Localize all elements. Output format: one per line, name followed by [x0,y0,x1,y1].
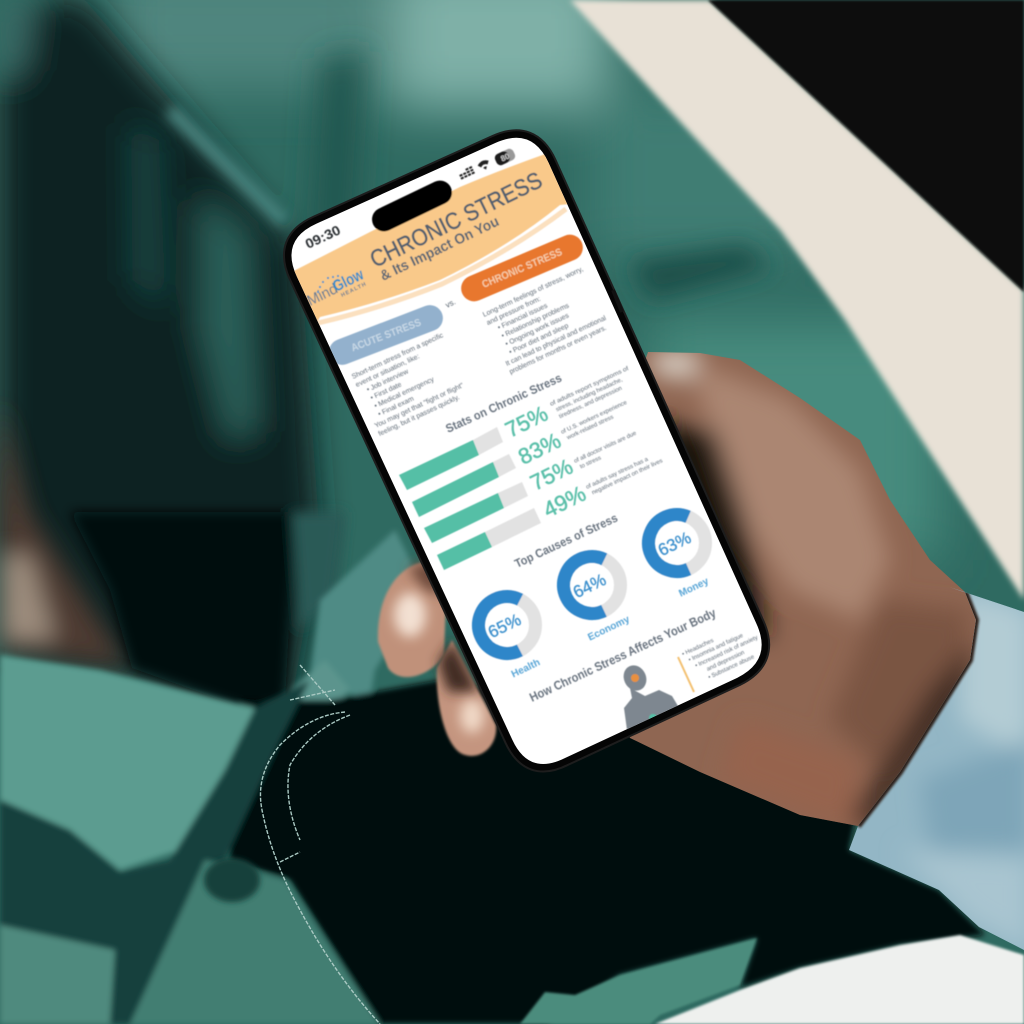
finger: middle [437,640,496,756]
body section heading: How Chronic Stress Affects Your Body [527,606,718,705]
logo: Mind [304,280,341,310]
symptoms list: • Increased risk of anxiety [694,635,759,669]
symptoms list: • Insomnia and fatigue [688,633,745,664]
white shirt at bottom [655,935,1024,1024]
stat: 49% negative impact [545,457,663,516]
jacket: lower folds [0,530,985,1024]
chronic stress description: Long-term feelings of stress, worry, [482,266,585,319]
acute stress description: • First date [370,381,403,402]
dark background corner [708,0,1024,292]
cream fabric strip [570,0,1024,600]
stat: 49% negative impact: 49% [539,481,590,522]
acute stress description: event or situation, like: [355,353,421,389]
acute stress pill: ACUTE STRESS [349,317,423,354]
donut: money: 63% [655,528,694,560]
teal sliver at bottom [520,938,757,1024]
header band [294,154,568,326]
stat: 75% adults: stress, including headache, [555,377,624,413]
symptoms list: • Substance abuse [708,654,756,681]
donut: health: 65% [485,610,524,642]
stats heading: Stats on Chronic Stress [443,371,564,436]
divider line [678,657,694,692]
donut: economy [554,547,632,643]
donut: money: Money [677,576,711,600]
logo: HEALTH [340,281,368,299]
status bar icons: 80 [499,151,512,163]
stat: 75% doctor visits [528,431,636,490]
stat: 49% negative impact: negative impact on their lives [591,458,664,496]
logo [306,270,366,306]
denim cuff [840,580,1024,960]
chronic stress description: It can lead to physical and emotional [505,315,608,368]
donut: health [471,589,542,678]
chronic stress description [482,266,612,376]
bar chart: stats [399,427,541,570]
stat: 75% adults: 75% [501,401,552,442]
chronic stress pill [460,234,584,302]
chronic stress description: • Financial issues [497,302,549,332]
stat: 49% negative impact: of adults say stress has a [585,456,650,491]
status bar time: 09:30 [303,222,343,252]
stat: 75% adults [504,365,629,438]
donut: money [639,505,715,600]
chronic stress description: • Ongoing work issues [504,312,571,348]
stat: 75% doctor visits: to stress [579,455,602,470]
donut: health: Health [510,657,542,680]
stat: 83% workers: 83% [514,428,565,469]
dynamic island [371,180,453,232]
phone body [291,138,762,764]
finger: index [378,560,446,677]
symptoms list: and depression [706,650,746,673]
chronic stress pill: CHRONIC STRESS [480,246,564,291]
stat: 83% workers [518,400,628,464]
phone screen: infographic [291,138,762,764]
acute stress description: You may get that "fight or flight" [374,382,465,430]
subtitle: & Its Impact On You [378,214,502,285]
status bar icons [458,147,517,180]
stat: 75% adults: tiredness, and depression [558,386,623,420]
stat: 75% adults: of adults report symptoms of [549,366,630,408]
donut: economy: 64% [570,570,609,602]
acute stress description: feeling, but it passes quickly. [378,394,461,438]
icon: body silhouette [623,664,678,730]
title: CHRONIC STRESS [366,167,546,272]
logo: Glow [330,266,367,296]
chronic stress description: problems for months or even years. [509,325,608,376]
acute stress description: • Final exam [377,395,415,418]
versus label: vs. [444,297,457,310]
causes heading: Top Causes of Stress [512,511,620,571]
acute stress description: • Job interview [366,368,411,394]
acute stress description: Short-term stress from a specific [351,332,445,381]
stat: 83% workers: of U.S. workers experience [560,400,629,436]
stat: 83% workers: work-related stress [565,414,615,442]
chronic stress description: • Poor diet and sleep [508,322,570,356]
symptoms list: • Headaches [681,638,715,658]
acute stress pill [330,304,444,366]
acute stress description [351,332,472,438]
hand [378,340,1024,960]
chronic stress description: and pressure from: [486,296,542,327]
symptoms list [682,634,758,678]
stat: 75% doctor visits: 75% [526,454,577,495]
donut: economy: Economy [586,614,632,643]
chronic stress description: • Relationship problems [501,302,571,340]
acute stress description: • Medical emergency [373,376,436,410]
stat: 75% doctor visits: of all doctor visits are due [573,430,638,465]
